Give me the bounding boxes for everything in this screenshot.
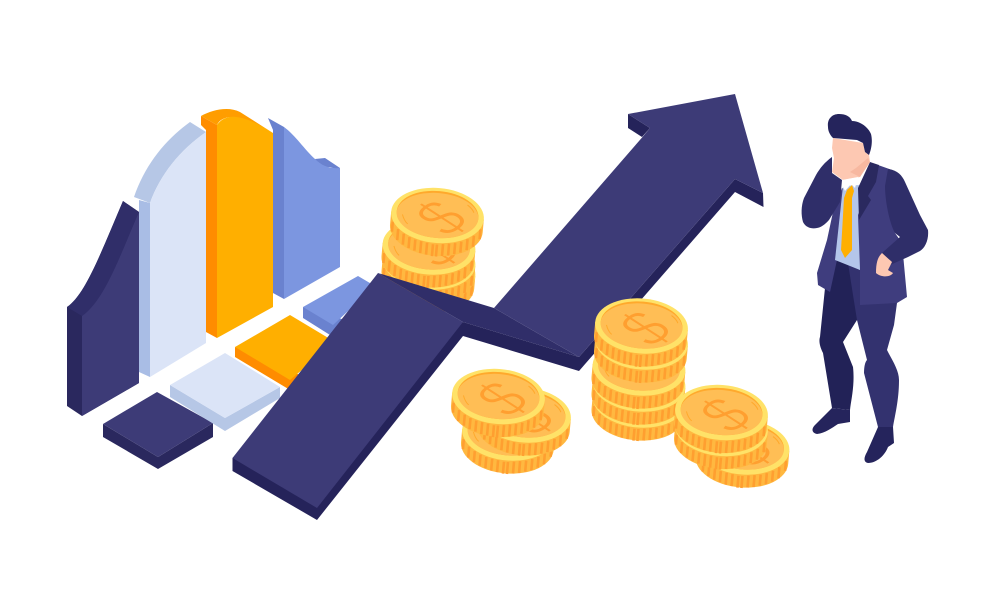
trousers: right leg <box>848 263 899 427</box>
coin stack: right <box>672 381 792 492</box>
arrow: upper shaft and head <box>494 94 763 357</box>
coin with dollar sign <box>592 295 690 371</box>
coin: $ <box>706 421 789 477</box>
coin: $ <box>392 221 475 277</box>
businessman <box>802 114 928 463</box>
arrow: lower segment face <box>232 273 463 508</box>
coin with dollar sign: $ <box>684 387 767 443</box>
face and hand <box>832 138 870 180</box>
jacket: left panel <box>817 188 845 292</box>
coin with dollar sign: $ <box>400 190 483 246</box>
arm: raised <box>802 157 842 228</box>
coin group: front centre <box>449 365 573 478</box>
arrow: head left edge <box>628 114 650 137</box>
arm: on hip <box>882 169 928 265</box>
bar: dark navy <box>67 201 139 416</box>
hair <box>828 114 872 155</box>
arrow: fold bottom edge <box>463 322 579 371</box>
hand: on hip <box>876 253 893 276</box>
tile: pale blue <box>170 353 280 431</box>
coin <box>589 337 688 413</box>
coin stack: tall <box>589 295 690 445</box>
tile: orange <box>235 315 335 390</box>
tie <box>841 185 854 258</box>
bar chart: isometric bars <box>67 109 340 416</box>
arrow: lower segment edge <box>232 322 463 520</box>
bar: pale blue <box>134 122 206 377</box>
jacket: right panel <box>858 165 907 305</box>
coin with dollar sign: $ <box>604 300 687 356</box>
arrow: fold face <box>378 273 579 357</box>
trousers: left leg <box>819 258 860 410</box>
neck shadow <box>850 158 870 177</box>
bar chart base tiles <box>103 276 375 469</box>
arrow: upper shaft edge <box>579 179 735 371</box>
coin with dollar sign: $ <box>461 371 544 427</box>
collar <box>842 177 858 191</box>
bar: orange <box>201 109 273 338</box>
tile: navy <box>103 392 213 469</box>
coin <box>379 241 478 317</box>
coin <box>459 402 557 478</box>
bar: periwinkle <box>268 118 340 299</box>
coin <box>379 231 478 307</box>
jacket: lapel <box>858 162 879 220</box>
coin stack: behind arrow <box>379 184 486 317</box>
shoe: right <box>864 427 894 463</box>
shoe: left <box>813 408 850 434</box>
coin <box>672 397 770 473</box>
arrow: head right edge <box>735 179 764 207</box>
growth arrow <box>232 94 764 520</box>
tile: periwinkle <box>303 276 375 335</box>
coin <box>589 369 688 445</box>
coin <box>592 311 690 387</box>
coin: $ <box>487 389 570 445</box>
coin <box>589 353 688 429</box>
shirt <box>835 185 860 270</box>
